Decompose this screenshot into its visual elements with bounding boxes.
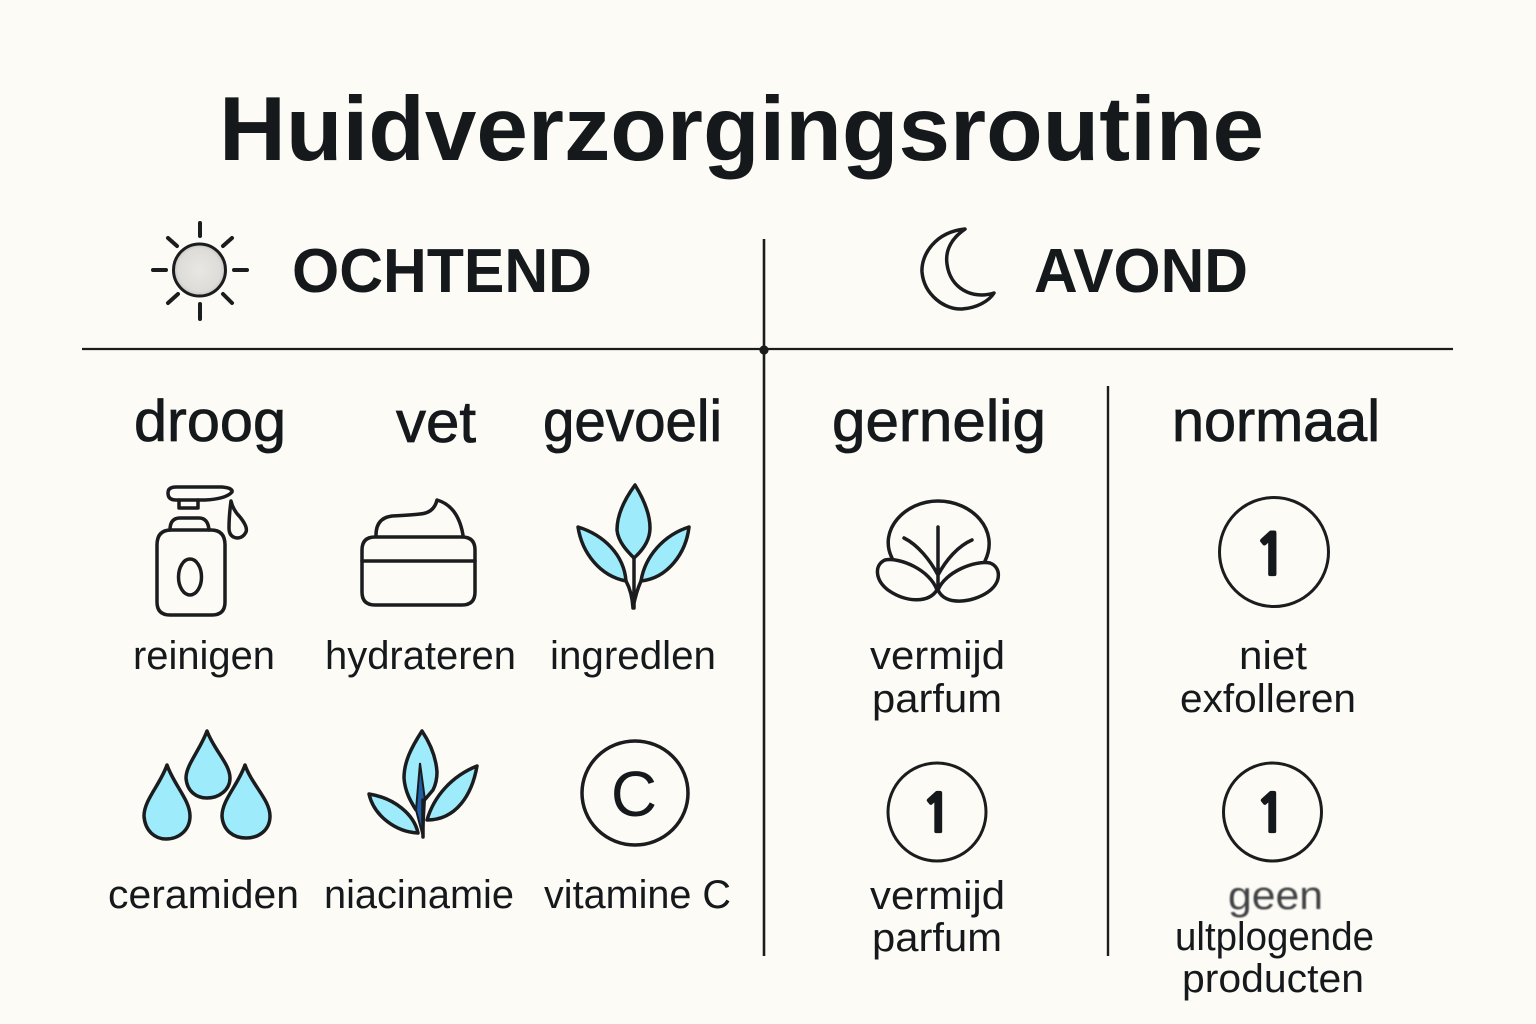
heading: avond: AVOND [1034,237,1248,306]
icon: letter C circle: C [611,758,657,830]
label: geen uitplogende producten [1175,874,1374,1001]
label: ingredlen: ingredlen [550,634,716,678]
label: reinigen: reinigen [133,634,275,678]
heading: ochtend: OCHTEND [292,237,592,306]
label: niacinamie: niacinamie [324,873,514,917]
column heading: gevoeli: gevoeli [543,389,722,454]
label: vitamine C: vitamine C [544,873,731,917]
label: niet exfolleren: exfolleren [1180,677,1356,721]
icon: moon [922,229,994,309]
column heading: gernelig: gernelig [832,389,1046,454]
title: Huidverzorgingsroutine [219,79,1264,180]
label: geen uitplogende producten: producten [1182,957,1364,1001]
label: ceramiden: ceramiden [108,873,299,917]
label: vermijd parfum: parfum [872,677,1002,721]
icon: water drops [144,731,270,839]
icon: number 1 circle: 1 [1255,787,1287,840]
icon: pump bottle [157,487,246,615]
label: vermijd parfum [870,874,1005,960]
icon: leaf blue [578,485,689,608]
label: niet exfolleren: niet [1239,634,1307,678]
icon: letter C circle [582,741,688,845]
grid lines [82,239,1453,956]
column heading: normaal: normaal [1172,389,1380,454]
label: vermijd parfum: vermijd [870,634,1005,678]
icon: plant blue [369,731,477,837]
icon: number 1 circle: 1 [1254,528,1288,584]
icon: number 1 circle [888,763,986,861]
label: niet exfolleren [1180,634,1356,721]
icon: number 1 circle: 1 [921,787,953,840]
label: vermijd parfum [870,634,1005,721]
icon: number 1 circle [1224,763,1322,861]
column heading: droog: droog [134,389,286,454]
icon: shell [877,501,998,601]
icon: number 1 circle [1220,498,1328,606]
label: geen uitplogende producten: ultplogende [1175,915,1374,959]
label: vermijd parfum: parfum [872,916,1002,960]
label: vermijd parfum: vermijd [870,874,1005,918]
column heading: vet: vet [396,390,476,455]
label: geen uitplogende producten: geen [1228,874,1323,918]
icon: sun [153,223,247,319]
icon: cream jar [362,500,475,605]
label: hydrateren: hydrateren [325,634,516,678]
